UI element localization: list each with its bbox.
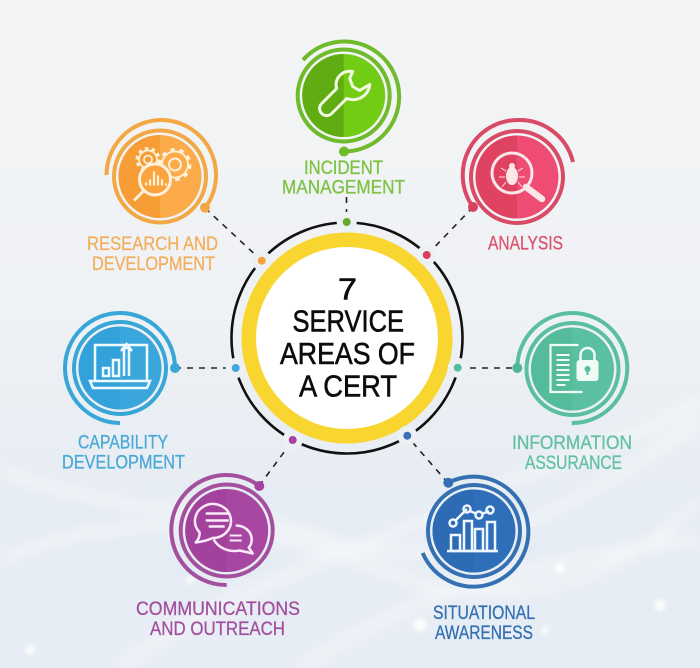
label: analysis: ANALYSIS — [488, 234, 563, 254]
icon: gears and magnifier — [134, 148, 190, 200]
label: capability development: CAPABILITY — [78, 432, 168, 454]
hub title — [280, 272, 415, 404]
hub title: A CERT — [299, 369, 397, 404]
icon: wrench — [320, 71, 370, 116]
node: capability development — [65, 313, 180, 423]
label: capability development: DEVELOPMENT — [62, 452, 185, 474]
node: information assurance — [512, 313, 627, 423]
icon: laptop with growth chart — [90, 344, 150, 388]
label: research and development — [87, 234, 218, 275]
node: analysis — [463, 120, 573, 223]
icon: magnifier and bug — [492, 153, 542, 199]
label: situational awareness: AWARENESS — [435, 623, 533, 644]
hub title: 7 — [338, 272, 357, 306]
label: capability development — [62, 432, 185, 474]
label: communications and outreach: COMMUNICATIONS — [136, 599, 300, 620]
central hub — [229, 215, 465, 454]
hub node dots — [229, 215, 465, 447]
label: incident management: MANAGEMENT — [282, 178, 405, 198]
label: communications and outreach: AND OUTREACH — [150, 619, 285, 640]
label: situational awareness — [433, 603, 535, 644]
icon: speech bubbles — [195, 504, 253, 554]
node: situational awareness — [423, 477, 528, 587]
label: information assurance: INFORMATION — [512, 433, 632, 454]
label: information assurance: ASSURANCE — [525, 453, 622, 474]
label: incident management: INCIDENT — [304, 158, 383, 179]
node: incident management — [298, 42, 399, 156]
node: communications and outreach — [171, 475, 273, 585]
icon: document and padlock — [550, 345, 598, 392]
label: situational awareness: SITUATIONAL — [433, 603, 535, 624]
label: research and development: DEVELOPMENT — [92, 254, 215, 275]
node: research and development — [106, 120, 216, 222]
connector: dashed lines — [175, 197, 517, 486]
icon: bar and line chart — [447, 506, 498, 551]
label: communications and outreach — [136, 599, 300, 640]
hub title: SERVICE — [292, 304, 404, 339]
hub title: AREAS OF — [280, 336, 415, 371]
label: information assurance — [512, 433, 632, 474]
label: research and development: RESEARCH AND — [87, 234, 218, 255]
label: incident management — [282, 158, 405, 198]
